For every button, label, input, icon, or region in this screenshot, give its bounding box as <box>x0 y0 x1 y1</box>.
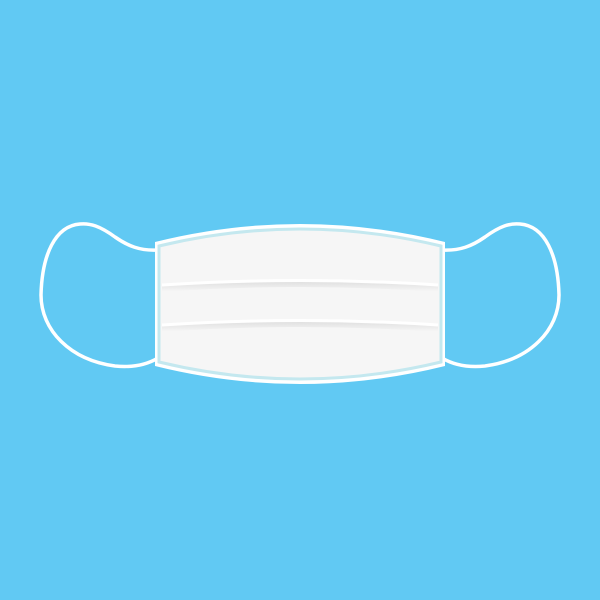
pleat 1 <box>162 280 438 292</box>
icon: right ear loop <box>442 224 559 367</box>
icon: left ear loop <box>41 224 158 367</box>
pleat 2 <box>162 320 438 332</box>
mask body <box>155 224 445 384</box>
